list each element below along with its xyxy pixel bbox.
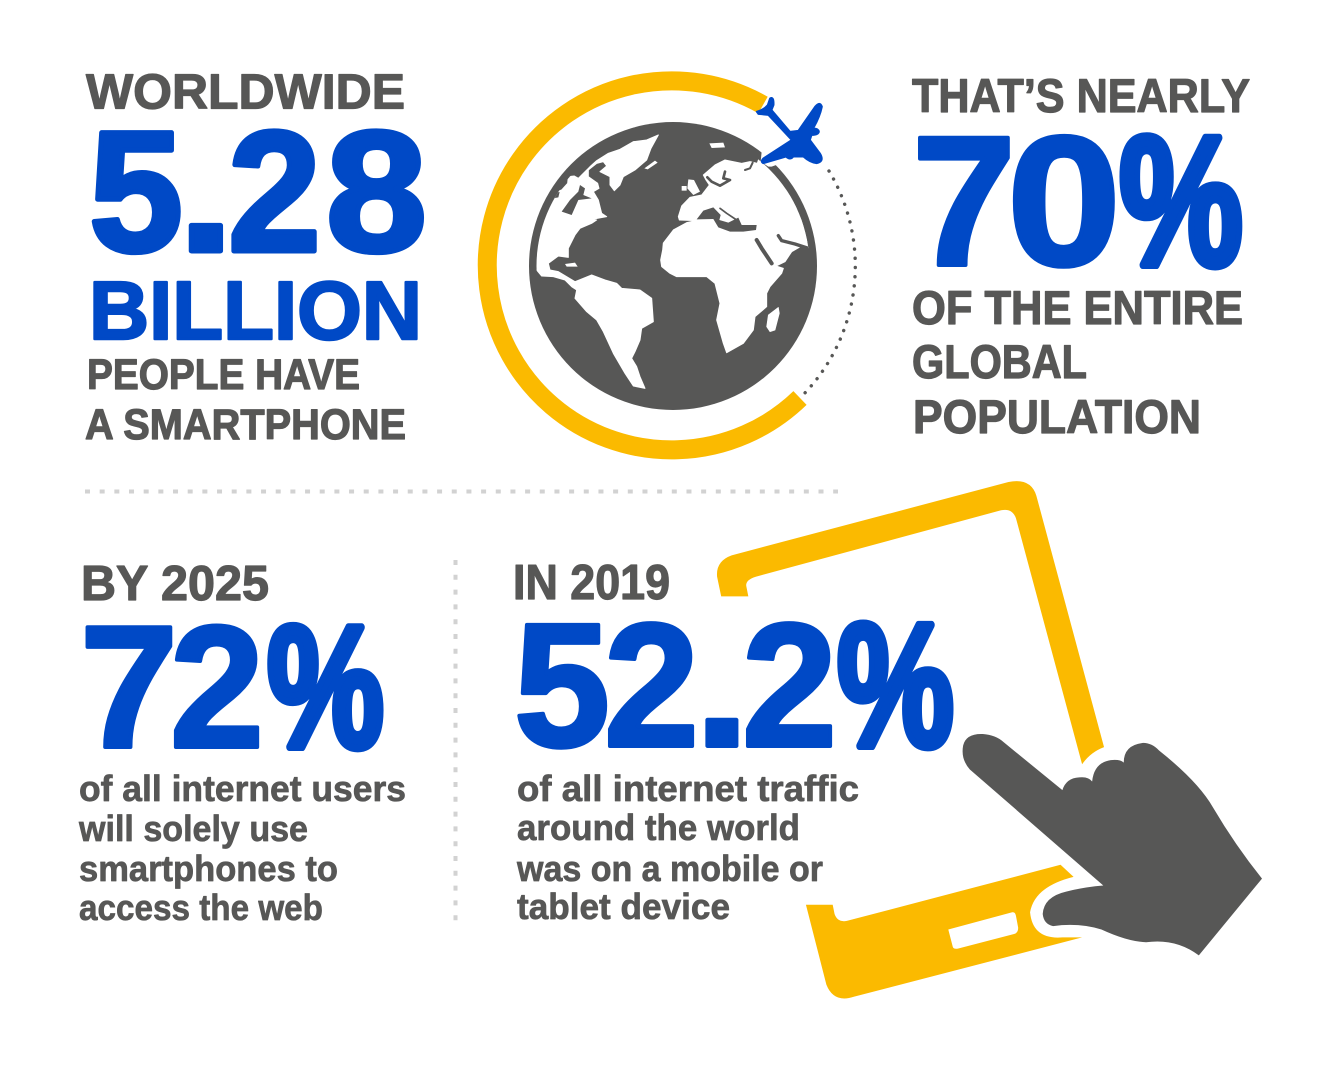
text: of all internet traffic — [516, 768, 859, 927]
big number: 52.2%: % — [837, 588, 954, 784]
big number: 5.28: 2 — [228, 96, 321, 288]
text: of all internet users: smartphones to — [79, 848, 338, 889]
big number: 52.2%: . — [694, 588, 750, 784]
text: people have a smartphone: PEOPLE HAVE — [87, 351, 360, 399]
text: of all internet traffic: tablet device — [517, 886, 730, 927]
heading: worldwide: WORLDWIDE — [86, 66, 405, 120]
big number: 70%: % — [1119, 99, 1243, 305]
icon: airplane — [757, 98, 822, 163]
big number: 72%: % — [267, 589, 384, 784]
heading: by 2025: BY 2025 — [81, 557, 269, 611]
big number: 52.2%: 2 — [742, 588, 837, 784]
dotted flight path — [801, 171, 855, 397]
text: of the entire global population: GLOBAL — [912, 335, 1087, 388]
text: of all internet traffic: of all internet traffic — [517, 768, 859, 809]
big number: 52.2%: 5 — [514, 588, 610, 784]
text: of the entire global population: POPULATION — [913, 390, 1201, 443]
text: of all internet users: of all internet users — [79, 768, 406, 809]
icon: globe with flight path — [487, 81, 855, 450]
panel: mobile traffic in 2019 — [513, 556, 954, 927]
big number: 5.28: 8 — [326, 96, 427, 288]
text: of all internet users — [78, 768, 406, 928]
text: of all internet users: will solely use — [78, 808, 308, 849]
text: people have a smartphone: A SMARTPHONE — [85, 401, 406, 449]
big number: 5.28: . — [178, 96, 234, 288]
globe — [522, 122, 817, 410]
big number: 52.2%: 2 — [604, 588, 699, 784]
text: of the entire global population — [912, 281, 1243, 443]
icon: pointing hand — [963, 734, 1262, 955]
big word: billion: BILLION — [89, 264, 422, 357]
panel: internet users by 2025 — [78, 557, 406, 928]
big number: 72%: 2 — [170, 589, 264, 784]
text: people have a smartphone — [85, 351, 406, 449]
panel: worldwide smartphone owners — [85, 66, 427, 449]
big number: 70%: 7 — [912, 99, 1016, 305]
panel: share of global population — [912, 69, 1250, 443]
big number: 5.28: 5 — [89, 96, 183, 288]
text: of all internet traffic: around the world — [517, 807, 800, 848]
big number: 72%: 7 — [80, 589, 178, 784]
text: of all internet traffic: was on a mobile or — [516, 848, 823, 889]
icon: tablet — [717, 481, 1104, 998]
heading: that's nearly: THAT’S NEARLY — [912, 69, 1250, 122]
text: of the entire global population: OF THE ENTIRE — [912, 281, 1243, 334]
yellow orbit ring — [487, 81, 800, 450]
big number: 70%: 0 — [1007, 99, 1121, 305]
text: of all internet users: access the web — [79, 887, 323, 928]
heading: in 2019: IN 2019 — [513, 556, 670, 610]
